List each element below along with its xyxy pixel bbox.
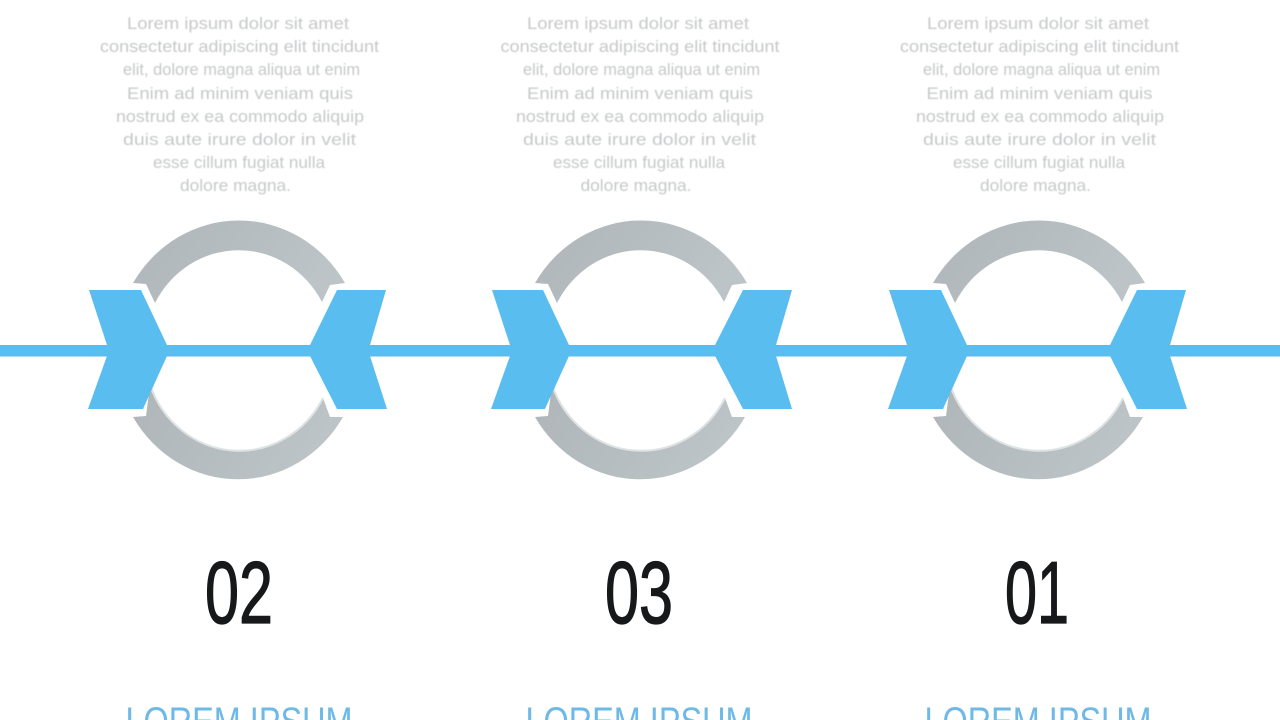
step 02 column: [88, 14, 387, 720]
step 03 description text: dolore magna.: [580, 176, 692, 195]
horizontal timeline line: [0, 345, 1280, 356]
step 01 description text: duis aute irure dolor in velit: [923, 130, 1156, 149]
lower ring arc: [133, 385, 343, 479]
step 01 column: [888, 14, 1187, 720]
lower ring arc: [933, 385, 1143, 479]
step 01 description text: esse cillum fugiat nulla: [953, 153, 1126, 172]
step 03 description text: Enim ad minim veniam quis: [527, 84, 753, 103]
step 03 column: [491, 14, 792, 720]
step 03 description text: elit, dolore magna aliqua ut enim: [523, 60, 760, 79]
step 01 description text: elit, dolore magna aliqua ut enim: [923, 60, 1160, 79]
step 02 description text: consectetur adipiscing elit tincidunt: [100, 37, 379, 56]
step 01 description text: consectetur adipiscing elit tincidunt: [900, 37, 1179, 56]
step 03 description text: duis aute irure dolor in velit: [523, 130, 756, 149]
upper ring arc: [933, 220, 1145, 303]
step 01 description text: dolore magna.: [980, 176, 1091, 195]
step 03 description text: nostrud ex ea commodo aliquip: [516, 107, 764, 126]
step 01 description text: Enim ad minim veniam quis: [926, 84, 1152, 103]
right arrow chevron: [1110, 290, 1187, 409]
step 02 description text: nostrud ex ea commodo aliquip: [116, 107, 364, 126]
step 03 description text: consectetur adipiscing elit tincidunt: [500, 37, 780, 56]
left arrow chevron: [888, 290, 967, 409]
step 02 description text: Enim ad minim veniam quis: [127, 84, 353, 103]
step 03 description text: Lorem ipsum dolor sit amet: [527, 14, 749, 33]
step 01 ring and arrows: [888, 220, 1187, 479]
step 02 description text: [100, 14, 379, 195]
step 02 ring and arrows: [88, 220, 387, 479]
upper ring arc: [133, 220, 345, 303]
left arrow chevron: [491, 290, 569, 409]
right arrow chevron: [715, 290, 792, 409]
step 02 description text: esse cillum fugiat nulla: [153, 153, 326, 172]
step 03 description text: [500, 14, 780, 195]
step 02 description text: duis aute irure dolor in velit: [123, 130, 356, 149]
right arrow chevron: [310, 290, 387, 409]
step 03 ring and arrows: [491, 220, 792, 479]
step 01 number: 01: [1005, 543, 1069, 642]
step 01 description text: nostrud ex ea commodo aliquip: [916, 107, 1164, 126]
step 02 number: 02: [205, 543, 273, 642]
step 01 description text: [900, 14, 1179, 195]
step 02 description text: Lorem ipsum dolor sit amet: [127, 14, 349, 33]
step 03 description text: esse cillum fugiat nulla: [553, 153, 726, 172]
upper ring arc: [535, 220, 747, 303]
lower ring arc: [535, 385, 745, 479]
left arrow chevron: [88, 290, 167, 409]
step 03 number: 03: [605, 543, 673, 642]
step 02 description text: dolore magna.: [180, 176, 291, 195]
step 02 description text: elit, dolore magna aliqua ut enim: [123, 60, 360, 79]
step 01 description text: Lorem ipsum dolor sit amet: [927, 14, 1149, 33]
